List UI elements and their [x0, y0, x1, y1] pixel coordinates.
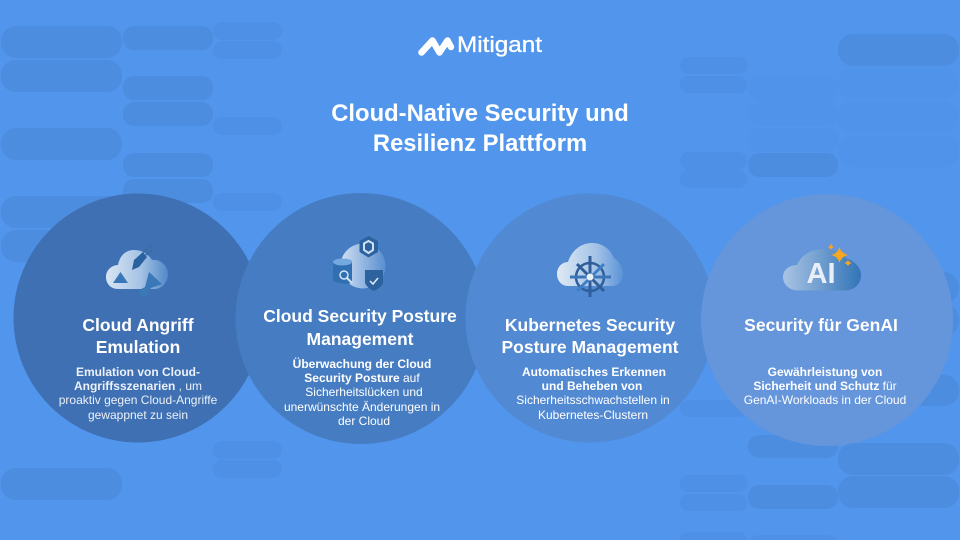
heading: Security für GenAI	[744, 315, 898, 335]
description: Kubernetes-Clustern	[538, 408, 648, 422]
logo: Mitigant	[422, 32, 543, 57]
description	[284, 356, 440, 428]
title	[331, 100, 629, 157]
title: Cloud-Native Security und	[331, 100, 629, 127]
panel: Cloud Security Posture Management	[236, 193, 486, 444]
description	[59, 365, 218, 422]
panel: Security für GenAI	[701, 194, 953, 446]
icon: AI cloud with stars	[783, 244, 861, 290]
description: proaktiv gegen Cloud-Angriffe	[59, 393, 218, 407]
icon: AI cloud with stars: AI	[806, 258, 836, 290]
icon: cloud security shields and database	[333, 236, 386, 291]
panel: Cloud Angriff Emulation	[14, 194, 262, 442]
description: unerwünschte Änderungen in	[284, 400, 440, 414]
icon: Mitigant mark	[422, 40, 451, 52]
description: Angriffsszenarien , um	[74, 379, 202, 393]
heading	[263, 306, 457, 349]
heading: Cloud Angriff	[82, 315, 194, 335]
panel: Kubernetes Security Posture Management	[466, 194, 714, 442]
heading: Cloud Security Posture	[263, 306, 457, 326]
icon: cloud with ship wheel	[557, 243, 623, 297]
description: und Beheben von	[542, 379, 642, 393]
description: Automatisches Erkennen	[522, 365, 666, 379]
heading	[502, 315, 679, 357]
description: der Cloud	[338, 414, 390, 428]
description: Sicherheit und Schutz für	[753, 379, 897, 393]
heading	[82, 315, 194, 357]
description: gewappnet zu sein	[88, 408, 188, 422]
description: Sicherheitslücken und	[305, 385, 423, 399]
description: GenAI-Workloads in der Cloud	[744, 393, 906, 407]
icon: cloud with rocket and flashlight	[106, 245, 168, 296]
description: Sicherheitsschwachstellen in	[516, 393, 670, 407]
logo: Mitigant: Mitigant	[457, 32, 543, 57]
description: Emulation von Cloud-	[76, 365, 200, 379]
heading: Management	[307, 329, 414, 349]
description	[744, 365, 906, 407]
description: Überwachung der Cloud	[293, 356, 431, 371]
heading: Emulation	[96, 337, 180, 357]
heading: Posture Management	[502, 337, 679, 357]
description: Gewährleistung von	[768, 365, 882, 379]
description	[516, 365, 670, 422]
title: Resilienz Plattform	[373, 130, 587, 157]
description: Security Posture auf	[304, 371, 420, 385]
heading: Kubernetes Security	[505, 315, 675, 335]
